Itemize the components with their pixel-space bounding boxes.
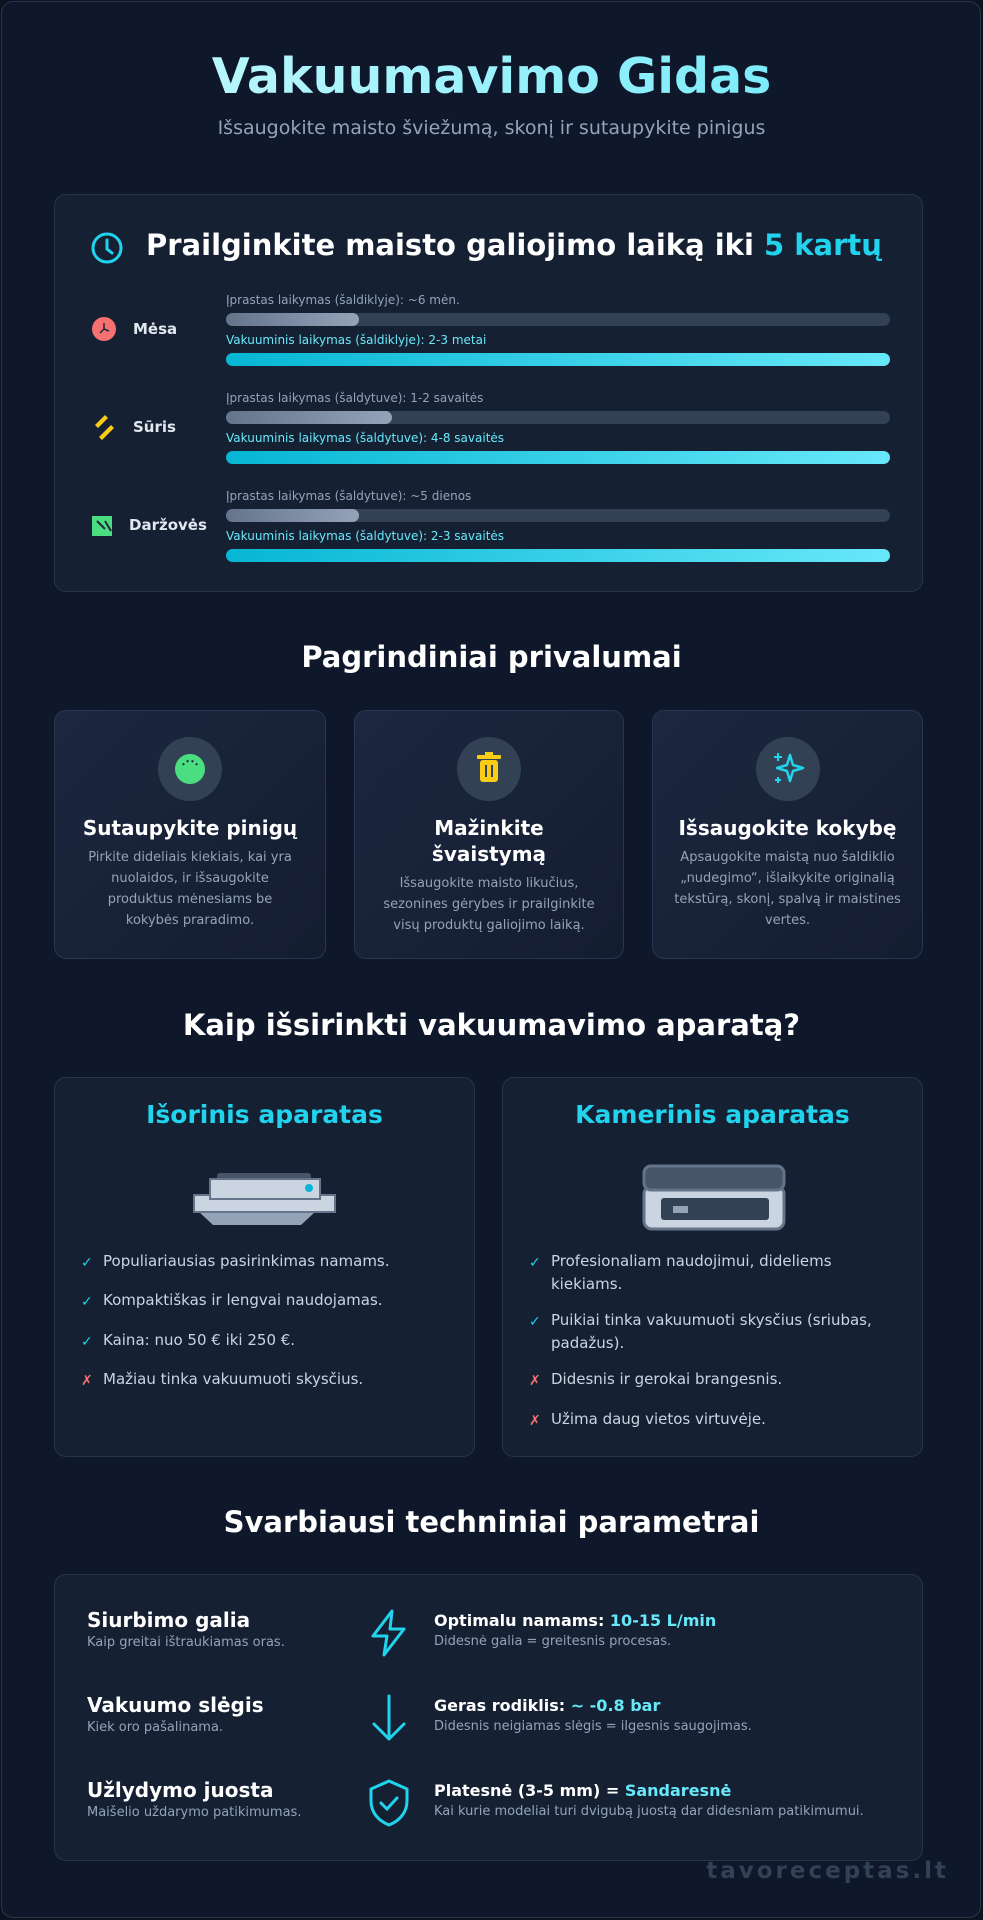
panel: external: Kaina: nuo 50 € iki 250 €.: [103, 1331, 295, 1349]
row: meat: Įprastas laikymas (šaldiklyje): ~6 mėn.: [226, 293, 460, 307]
panel: chamber: Užima daug vietos virtuvėje.: [551, 1410, 766, 1428]
icon: chamber sealer: [642, 1164, 786, 1230]
row: vegetables: Įprastas laikymas (šaldytuve): ~5 dienos: [226, 489, 471, 503]
panel: external: Išorinis aparatas: [146, 1100, 383, 1129]
card: reduce waste: [354, 710, 624, 959]
panel: external: ✓: [81, 1294, 93, 1310]
panel: chamber: ✓: [529, 1314, 541, 1330]
param: pressure: Kiek oro pašalinama.: [87, 1720, 223, 1735]
panel: external: ✗: [81, 1373, 93, 1389]
row: meat: [92, 293, 890, 366]
row: meat: Vakuuminis laikymas (šaldiklyje): 2-3 metai: [226, 333, 486, 347]
row: vegetables: Vakuuminis laikymas (šaldytuve): 2-3 savaitės: [226, 529, 504, 543]
card: keep quality: Apsaugokite maistą nuo šaldiklio „nudegimo“, išlaikykite originalią tekstūrą, skonį, spalvą ir maistines vertes.: [674, 850, 901, 928]
row: vegetables: [92, 489, 890, 562]
card: reduce waste: Mažinkite: [434, 816, 544, 840]
card: keep quality: Išsaugokite kokybę: [678, 816, 896, 840]
panel: shelf life: [54, 194, 923, 592]
panel: external: ✓: [81, 1255, 93, 1271]
panel heading: Prailginkite maisto galiojimo laiką iki 5 kartų: [146, 228, 882, 262]
param: seal: Užlydymo juosta: [87, 1778, 273, 1802]
param: pressure: [87, 1693, 752, 1741]
panel: external: Populiariausias pasirinkimas namams.: [103, 1252, 390, 1270]
card: keep quality: [652, 710, 923, 959]
param: seal: Platesnė (3-5 mm) = Sandaresnė: [434, 1781, 731, 1800]
panel: chamber: ✓: [529, 1255, 541, 1271]
row: cheese: Sūris: [133, 418, 176, 436]
heading: choose: Kaip išsirinkti vakuumavimo aparatą?: [183, 1008, 800, 1042]
card: save money: Pirkite dideliais kiekiais, kai yra nuolaidos, ir išsaugokite produktus mėnesiams be kokybės praradimo.: [88, 850, 292, 928]
card: reduce waste: Išsaugokite maisto likučius, sezonines gėrybes ir prailginkite visų produktų galiojimo laiką.: [383, 876, 595, 933]
heading: tech params: Svarbiausi techniniai parametrai: [224, 1505, 759, 1539]
panel: chamber: ✗: [529, 1373, 541, 1389]
icon: trash: [457, 737, 521, 801]
panel: chamber: [502, 1077, 923, 1457]
row: meat: Mėsa: [133, 320, 177, 338]
param: seal: Kai kurie modeliai turi dvigubą juostą dar didesniam patikimumui.: [434, 1804, 864, 1819]
param: seal: [87, 1778, 864, 1826]
icon: vegetables: [92, 516, 112, 536]
panel: chamber: Puikiai tinka vakuumuoti skysčius (sriubas, padažus).: [551, 1311, 872, 1352]
icon: external sealer: [193, 1173, 336, 1225]
row: vegetables: Daržovės: [129, 516, 207, 534]
panel: chamber: ✗: [529, 1413, 541, 1429]
param: pressure: Vakuumo slėgis: [87, 1693, 264, 1717]
card: save money: [54, 710, 326, 959]
watermark: tavoreceptas.lt: [706, 1858, 949, 1884]
title: Vakuumavimo Gidas: [212, 48, 771, 105]
icon: meat: [92, 317, 116, 341]
panel: chamber: Kamerinis aparatas: [575, 1100, 850, 1129]
param: suction: [87, 1608, 716, 1656]
icon: cheese: [95, 415, 114, 440]
card: save money: Sutaupykite pinigų: [83, 816, 297, 840]
panel: external: [54, 1077, 475, 1457]
panel: external: ✓: [81, 1334, 93, 1350]
param: suction: Siurbimo galia: [87, 1608, 250, 1632]
icon: coin: [158, 737, 222, 801]
panel: chamber: Profesionaliam naudojimui, dideliems kiekiams.: [551, 1252, 832, 1293]
param: seal: Maišelio uždarymo patikimumas.: [87, 1805, 301, 1820]
param: pressure: Geras rodiklis: ~ -0.8 bar: [434, 1696, 660, 1715]
row: cheese: Įprastas laikymas (šaldytuve): 1-2 savaitės: [226, 391, 483, 405]
icon: clock: [92, 232, 122, 264]
panel: params: [54, 1574, 923, 1861]
icon: shield: [370, 1780, 408, 1826]
param: suction: Optimalu namams: 10-15 L/min: [434, 1611, 716, 1630]
row: cheese: [95, 391, 890, 464]
param: suction: Didesnė galia = greitesnis procesas.: [434, 1634, 671, 1649]
subtitle: Išsaugokite maisto šviežumą, skonį ir sutaupykite pinigus: [218, 117, 765, 139]
panel: external: Mažiau tinka vakuumuoti skysčius.: [103, 1370, 363, 1388]
icon: bolt: [371, 1610, 406, 1656]
row: cheese: Vakuuminis laikymas (šaldytuve): 4-8 savaitės: [226, 431, 504, 445]
card: reduce waste: švaistymą: [432, 842, 546, 866]
icon: sparkles: [756, 737, 820, 801]
title: [0, 48, 983, 105]
panel: external: Kompaktiškas ir lengvai naudojamas.: [103, 1291, 383, 1309]
param: pressure: Didesnis neigiamas slėgis = ilgesnis saugojimas.: [434, 1719, 752, 1734]
param: suction: Kaip greitai ištraukiamas oras.: [87, 1635, 285, 1650]
icon: arrow down: [372, 1694, 406, 1741]
panel: chamber: Didesnis ir gerokai brangesnis.: [551, 1370, 782, 1388]
heading: benefits: Pagrindiniai privalumai: [301, 640, 682, 674]
